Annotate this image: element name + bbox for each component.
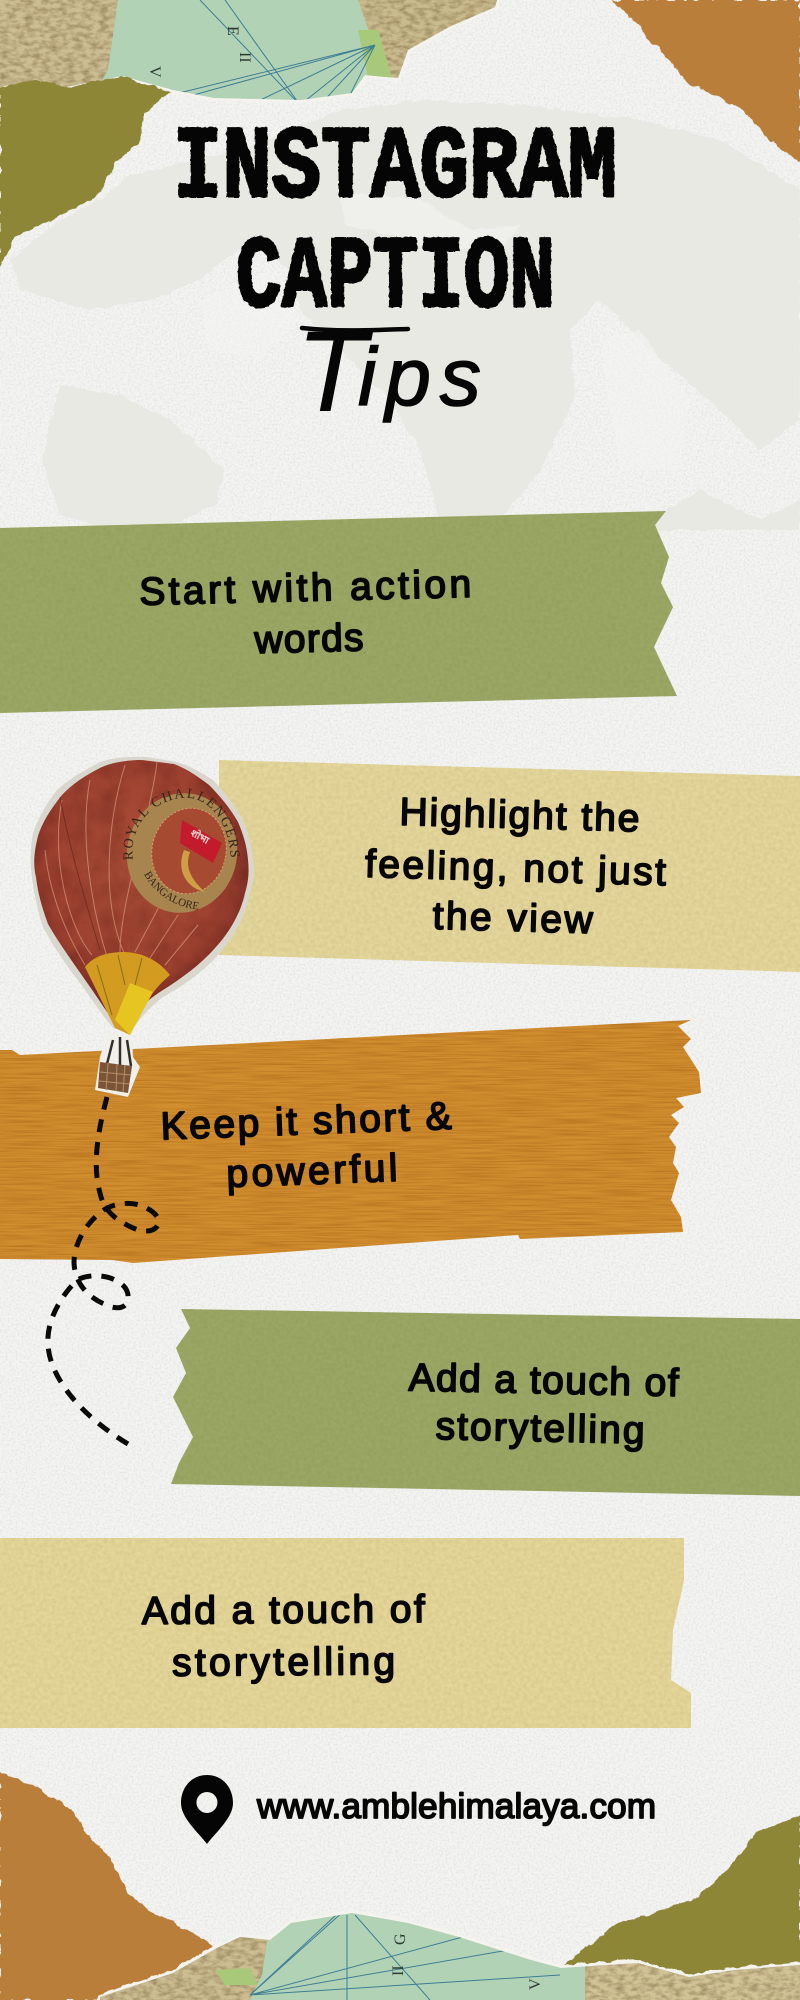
torn white edge	[0, 0, 497, 100]
basket sticker	[95, 1033, 140, 1097]
red flag	[180, 820, 222, 863]
text: keep it short: Keep it short &	[160, 1095, 452, 1148]
text: add a touch of storytelling: storytelling	[172, 1640, 395, 1685]
heading: Tips: T	[296, 308, 374, 436]
map lettering: V	[527, 1978, 544, 1990]
icon: hot air balloon: शोभा	[189, 824, 213, 847]
torn white edge	[100, 1913, 800, 2000]
basket	[98, 1062, 132, 1093]
text: add a touch of storytelling: storytelling	[435, 1405, 645, 1452]
band 3: orange wood tape	[0, 1020, 701, 1263]
website url: www.amblehimalaya.com	[256, 1787, 656, 1826]
text: keep it short	[160, 1095, 454, 1198]
band 1: green tape	[0, 511, 677, 713]
bottom orange corner	[0, 1772, 230, 2000]
map lettering: G	[392, 1933, 409, 1945]
heading: Caption: CAPTION	[236, 221, 555, 337]
map route lines	[250, 1910, 560, 2000]
balloon gores	[45, 762, 198, 965]
heading: Instagram: INSTAGRAM	[173, 111, 617, 227]
text: highlight the feeling	[363, 790, 668, 944]
map land left	[0, 0, 118, 90]
icon: location pin	[181, 1775, 233, 1844]
map lettering: II	[236, 52, 253, 63]
text: highlight the feeling: the view	[432, 895, 594, 942]
map land left	[100, 1937, 268, 2000]
text: keep it short: powerful	[226, 1147, 398, 1196]
balloon skirt	[85, 952, 170, 1035]
text: add a touch of storytelling: Add a touch of	[408, 1356, 679, 1405]
text: start with action words	[139, 563, 473, 665]
contact row	[181, 1775, 656, 1844]
band 2: yellow tape	[219, 760, 800, 972]
badge lettering: BANGALORE	[144, 870, 198, 910]
text: start with action words: words	[253, 616, 364, 662]
map land right	[358, 0, 500, 82]
balloon sticker outline	[31, 757, 254, 1033]
lighter map gaps	[200, 190, 690, 470]
title	[173, 111, 617, 436]
heading: Tips: ips	[358, 332, 490, 423]
bottom olive corner	[561, 1815, 800, 1985]
text: start with action words: Start with action	[139, 563, 472, 614]
map lettering: E	[224, 26, 241, 36]
map lettering: II	[390, 1965, 407, 1976]
top map scrap	[0, 0, 500, 104]
ropes	[107, 1037, 131, 1066]
heading: Tips	[296, 308, 490, 436]
olive corner top-left	[0, 76, 171, 267]
orange corner top-right	[612, 0, 800, 163]
text: highlight the feeling: Highlight the	[399, 791, 640, 840]
band 5: yellow tape	[0, 1538, 691, 1728]
text: add a touch of storytelling: Add a touch of	[142, 1588, 425, 1633]
sponsor badge	[116, 783, 248, 923]
badge crescent	[181, 850, 205, 892]
text: add a touch of storytelling	[142, 1588, 425, 1685]
balloon envelope	[34, 760, 249, 1024]
icon: hot air balloon	[30, 756, 254, 1097]
map lettering	[390, 1933, 544, 1990]
band 4: green tape	[171, 1309, 800, 1496]
badge lettering	[123, 788, 240, 910]
text: highlight the feeling: feeling, not just	[365, 843, 667, 894]
bottom map scrap	[97, 1910, 800, 2000]
map lettering: V	[146, 66, 163, 78]
faded world map	[10, 100, 800, 530]
badge lettering: ROYAL CHALLENGERS	[123, 788, 240, 860]
map route lines	[182, 0, 376, 100]
map land right	[585, 1960, 800, 2000]
text: add a touch of storytelling	[407, 1356, 679, 1453]
dashed flight path	[48, 1097, 159, 1448]
map lettering	[146, 26, 253, 78]
